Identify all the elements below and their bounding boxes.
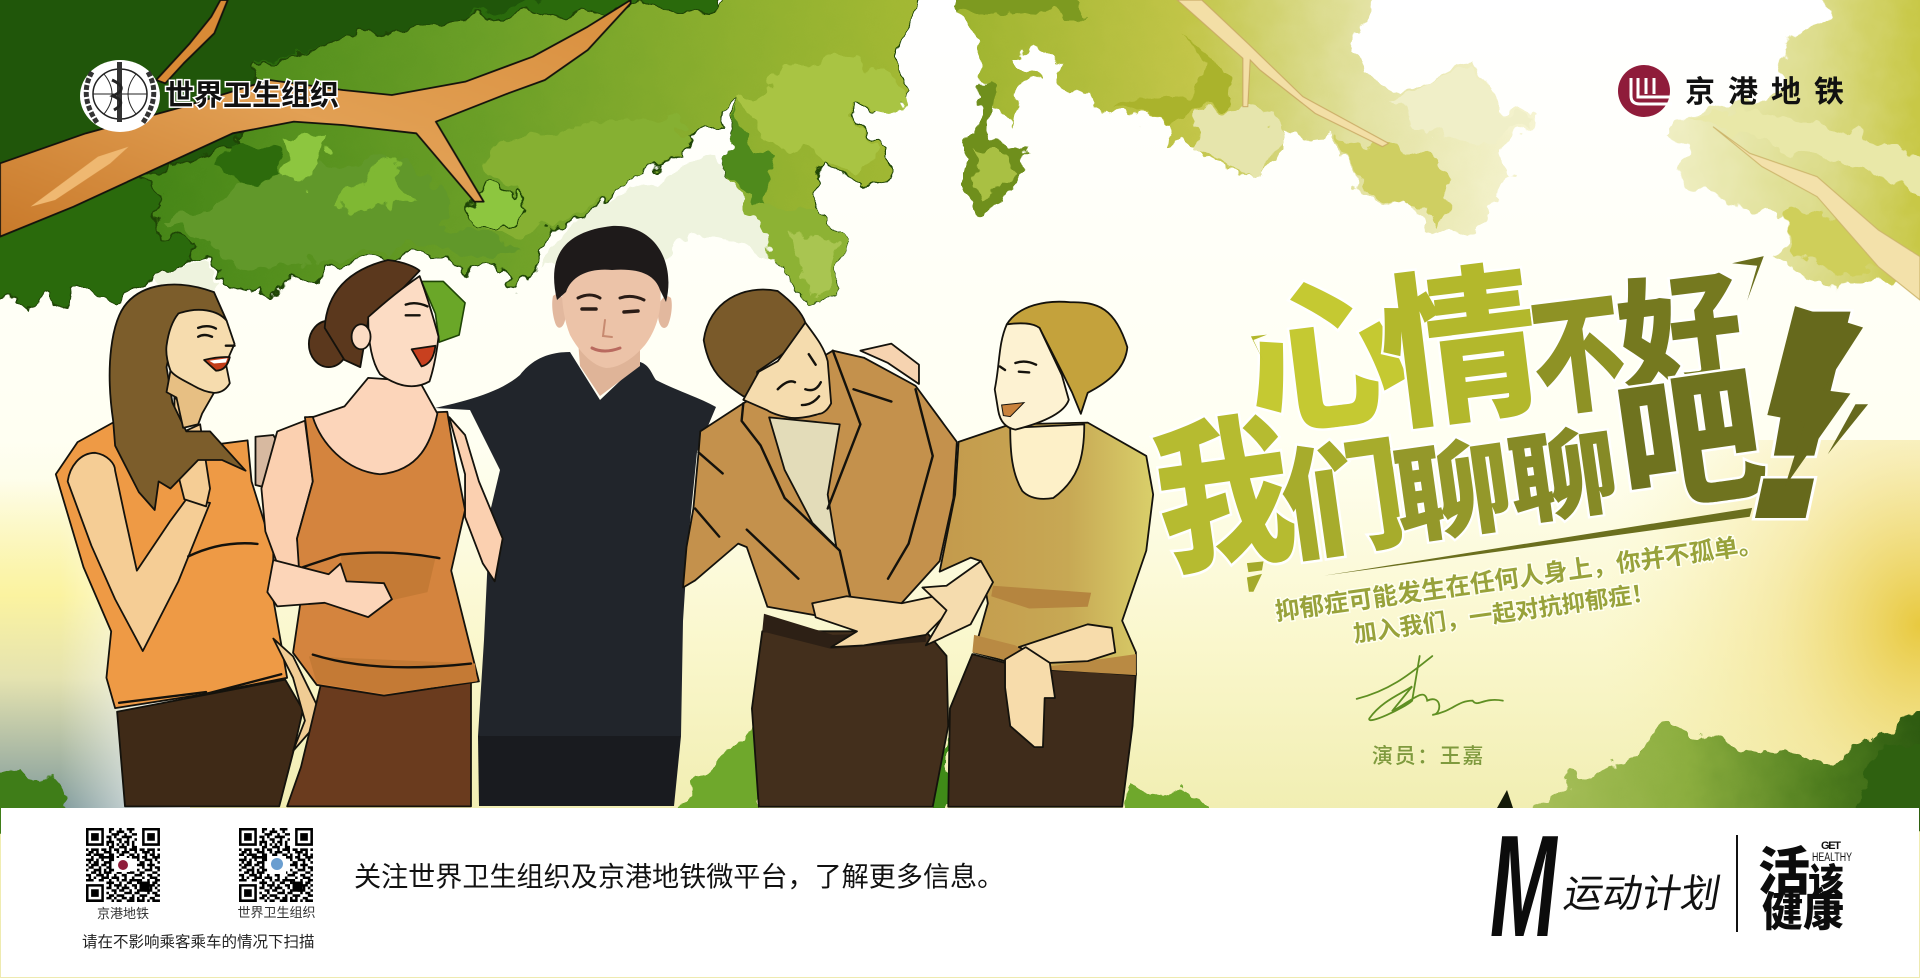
- trousers: [948, 654, 1136, 807]
- forearm: [1019, 624, 1115, 663]
- sweater: [940, 423, 1153, 675]
- mouth: [204, 357, 230, 371]
- headline: 心情不好: 好: [1610, 260, 1750, 412]
- trousers: [478, 736, 681, 806]
- person: man in tan jacket: [683, 290, 957, 807]
- hair: [1007, 302, 1127, 414]
- hair bun: [309, 321, 348, 367]
- face: [368, 276, 439, 386]
- person: woman with long hair: [56, 285, 323, 806]
- WHO emblem: [80, 60, 160, 132]
- belt: [762, 614, 926, 649]
- QR label: 京港地铁: [97, 906, 149, 921]
- waist fold: [991, 586, 1091, 609]
- small dark tree tip: [1497, 790, 1513, 808]
- neck: [167, 371, 214, 428]
- headline: 心情不好: 心: [1236, 262, 1417, 459]
- hair: [554, 226, 668, 302]
- QR code: MTR: [86, 828, 160, 921]
- lower hand: [1005, 647, 1055, 747]
- logo: M exercise plan: M: [1490, 805, 1558, 967]
- long hair: [110, 285, 246, 510]
- headline: 我们聊聊吧!: 聊: [1501, 415, 1625, 538]
- logo: WHO: [80, 60, 339, 132]
- scan notice: 请在不影响乘客乘车的情况下扫描: [82, 933, 315, 951]
- right arm: [449, 417, 503, 581]
- friend's hand on shoulder: [255, 435, 287, 489]
- person: actor Wang Jia: [435, 226, 716, 806]
- face: [995, 323, 1069, 430]
- subtitle text: 抑郁症可能发生在任何人身上，你并不孤单。: [1273, 530, 1764, 626]
- orange top: [56, 422, 287, 708]
- shirt folds: [119, 543, 281, 703]
- headline: 我们聊聊吧!: 我: [1145, 398, 1304, 597]
- leaf behind head: [422, 281, 465, 342]
- hanging hand from woman 2: [273, 639, 323, 751]
- t-shirt: [769, 417, 840, 547]
- tank shading: [341, 553, 435, 603]
- facial lines: [778, 354, 821, 405]
- chest: [1010, 424, 1084, 499]
- logo: Get Healthy: 该: [1808, 861, 1844, 902]
- eye: [406, 303, 427, 315]
- ears: [552, 294, 672, 328]
- hand on shoulder: [860, 344, 919, 384]
- hair: [704, 290, 805, 400]
- logo: Get Healthy: [1758, 840, 1852, 935]
- bottom white band: [1, 808, 1919, 977]
- headline: 心情不好: 情: [1371, 249, 1549, 452]
- mouth: [412, 346, 435, 366]
- actor credit: 演员：王嘉: [1372, 745, 1485, 768]
- headline: 我们聊聊吧!: !: [1708, 246, 1899, 582]
- tank top: [293, 412, 479, 696]
- face: [562, 264, 661, 368]
- follow message: 关注世界卫生组织及京港地铁微平台，了解更多信息。: [354, 861, 1004, 892]
- bushes bottom left and centre: [0, 722, 1200, 830]
- chest: [313, 378, 437, 474]
- facial features: [578, 295, 644, 351]
- headline: 我们聊聊吧!: 们: [1273, 426, 1413, 578]
- logo: M exercise plan: [1490, 805, 1724, 967]
- forearm across: [812, 594, 950, 647]
- subtitle text: 加入我们，一起对抗抑郁症！: [1352, 579, 1656, 647]
- bushes bottom right: [1520, 700, 1920, 830]
- hair: [325, 260, 420, 367]
- logo: Get Healthy: 活: [1758, 844, 1810, 902]
- person: woman with bun: [255, 260, 503, 806]
- headline: 我们聊聊吧!: 吧: [1607, 352, 1774, 533]
- person: woman in yellow sweater: [922, 302, 1153, 807]
- logo: Get Healthy: GET: [1821, 840, 1841, 852]
- tree canopy foliage: [0, 0, 1920, 320]
- headline: 心情不好: 不: [1524, 280, 1633, 434]
- logo: M exercise plan: 运动计划: [1560, 872, 1724, 916]
- raised arm: [68, 453, 210, 651]
- ear: [352, 324, 371, 349]
- tree branches left: [0, 0, 631, 237]
- WHO name: 世界卫生组织: [165, 79, 339, 112]
- dark left foliage: [0, 0, 716, 320]
- QR label: 世界卫生组织: [237, 905, 316, 920]
- headline: 我们聊聊吧!: [1145, 246, 1899, 597]
- MTR emblem: [1618, 65, 1672, 117]
- headline accents and underline: [1247, 256, 1868, 592]
- hem: [972, 635, 1136, 675]
- headline: 心情不好: [1236, 249, 1750, 459]
- left arm: [261, 421, 313, 574]
- pale clouds behind leaves: [150, 157, 808, 293]
- forearm and hand: [267, 560, 392, 617]
- hoodie: [435, 352, 716, 736]
- hanging twig and leaf cluster: [960, 83, 1027, 213]
- olive branches: [1177, 0, 1920, 300]
- logo: Get Healthy: HEALTHY: [1812, 852, 1852, 864]
- pale foliage right: [1670, 0, 1920, 300]
- divider: [1736, 835, 1738, 932]
- face lines: [198, 326, 235, 346]
- hand on man: [922, 561, 993, 645]
- QR code: WHO: [237, 828, 316, 920]
- headline: 我们聊聊吧!: 聊: [1387, 426, 1520, 558]
- signature: [1357, 656, 1503, 720]
- jacket lines: [695, 351, 933, 596]
- logo: Get Healthy: 健康: [1762, 889, 1844, 935]
- jacket: [683, 351, 957, 621]
- trousers: [287, 681, 471, 806]
- mouth: [1002, 403, 1024, 417]
- trousers: [752, 631, 948, 807]
- raised hand: [174, 397, 210, 506]
- mid green foliage: [141, 0, 931, 307]
- eyes: [1000, 362, 1036, 372]
- face: [166, 310, 235, 393]
- olive foliage upper centre: [960, 0, 1535, 238]
- bushes along the ground: [0, 700, 1920, 830]
- trousers: [117, 680, 303, 806]
- logo: MTR Beijing: [1618, 65, 1857, 117]
- face: [743, 323, 831, 418]
- MTR name: 京港地铁: [1685, 76, 1857, 109]
- neck: [578, 340, 640, 396]
